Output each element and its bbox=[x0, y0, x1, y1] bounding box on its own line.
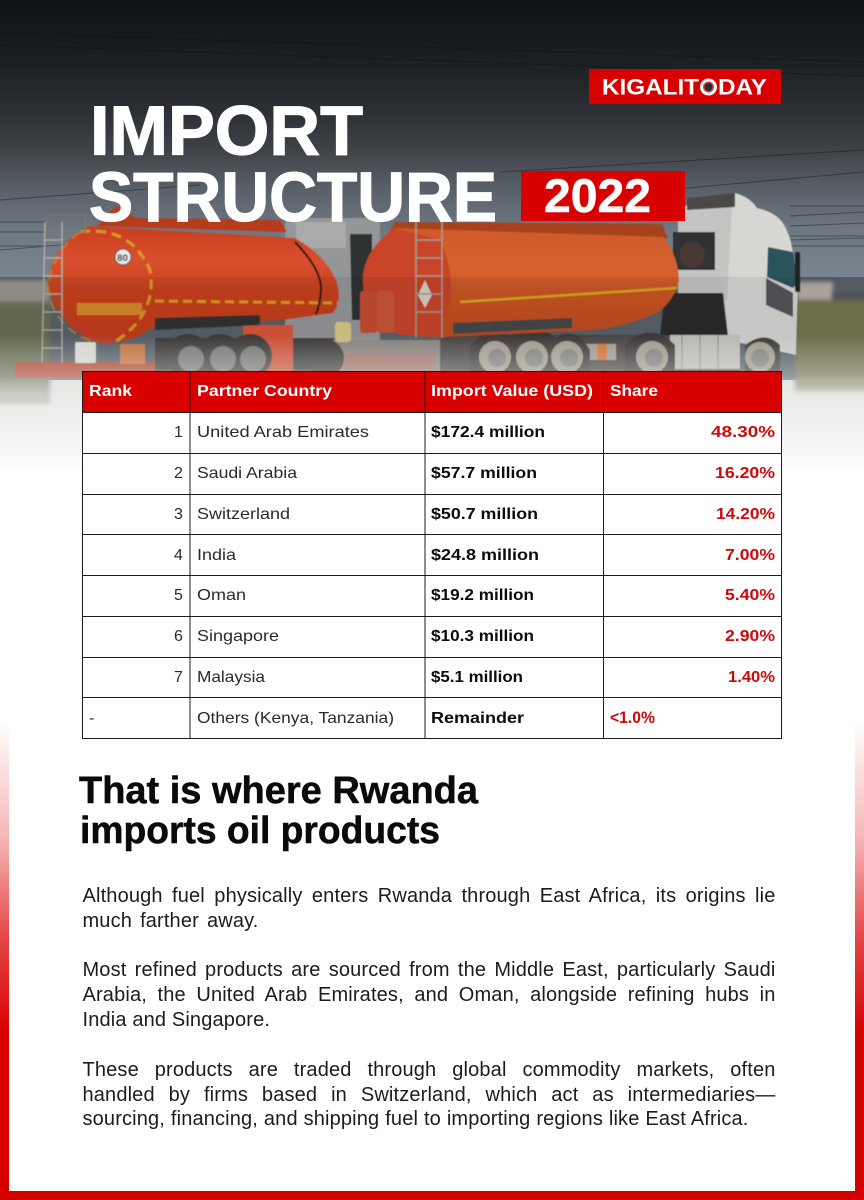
table body: 1.40% bbox=[728, 669, 775, 686]
table body: 16.20% bbox=[715, 465, 775, 482]
table body: 5.40% bbox=[725, 587, 775, 604]
logo: Kigali Today: DAY bbox=[718, 74, 767, 100]
logo: Kigali Today bbox=[589, 69, 781, 104]
table body: $19.2 million bbox=[431, 587, 534, 604]
body text: much farther away. bbox=[82, 910, 258, 932]
table header: Import Value (USD) bbox=[431, 383, 593, 400]
body text: These products are traded through global commodity markets, often bbox=[82, 1059, 776, 1081]
table body: $24.8 million bbox=[431, 547, 539, 564]
table body: India bbox=[197, 547, 236, 564]
table body: 5 bbox=[174, 587, 183, 604]
table body: 7 bbox=[174, 669, 183, 686]
title: STRUCTURE bbox=[89, 158, 497, 236]
body text: India and Singapore. bbox=[82, 1009, 270, 1031]
table body: 2 bbox=[174, 465, 183, 482]
tractor cab bbox=[678, 193, 798, 355]
table header: Rank bbox=[89, 383, 132, 400]
table body: 2.90% bbox=[725, 628, 775, 645]
table body: 48.30% bbox=[711, 424, 775, 441]
section heading bbox=[79, 770, 479, 852]
table body: Switzerland bbox=[197, 506, 290, 523]
title: IMPORT bbox=[90, 92, 363, 170]
table body: 14.20% bbox=[716, 506, 775, 523]
table body: Singapore bbox=[197, 628, 279, 645]
section heading: imports oil products bbox=[80, 810, 440, 852]
table body: - bbox=[89, 710, 94, 727]
table body: Saudi Arabia bbox=[197, 465, 297, 482]
left tank bbox=[97, 205, 287, 232]
chassis and deck bbox=[15, 362, 155, 378]
body text: handled by firms based in Switzerland, which act as intermediaries— bbox=[82, 1084, 776, 1106]
table body: $57.7 million bbox=[431, 465, 537, 482]
table header bbox=[82, 371, 782, 412]
table body: $5.1 million bbox=[431, 669, 523, 686]
body text: Although fuel physically enters Rwanda through East Africa, its origins lie bbox=[82, 885, 776, 907]
white content panel with red gradient frame bbox=[0, 700, 864, 1200]
body text: Most refined products are sourced from the Middle East, particularly Saudi bbox=[82, 959, 776, 981]
table body: $10.3 million bbox=[431, 628, 534, 645]
year badge bbox=[521, 169, 685, 222]
wheels bbox=[166, 329, 780, 378]
table body: 6 bbox=[174, 628, 183, 645]
table body bbox=[82, 371, 782, 739]
table body: 4 bbox=[174, 547, 183, 564]
table body: Malaysia bbox=[197, 669, 265, 686]
section heading: That is where Rwanda bbox=[79, 770, 479, 812]
photo background: tanker truck bbox=[0, 0, 864, 475]
table body: Remainder bbox=[431, 710, 524, 727]
title bbox=[89, 92, 497, 236]
table body: $172.4 million bbox=[431, 424, 545, 441]
right tank bbox=[385, 222, 668, 240]
body text: sourcing, financing, and shipping fuel to importing regions like East Africa. bbox=[82, 1108, 748, 1130]
table body: $50.7 million bbox=[431, 506, 538, 523]
year badge: 2022 bbox=[544, 169, 651, 222]
table body: 7.00% bbox=[725, 547, 775, 564]
table body: 1 bbox=[174, 424, 183, 441]
table body: 3 bbox=[174, 506, 183, 523]
import partners table bbox=[82, 371, 782, 739]
table body: Others (Kenya, Tanzania) bbox=[197, 710, 394, 727]
table body: <1.0% bbox=[610, 708, 655, 727]
rear cab behind left tank bbox=[285, 218, 380, 348]
photo background: tanker truck: 80 bbox=[117, 253, 128, 264]
logo: Kigali Today: KIGALIT bbox=[602, 74, 700, 100]
table header: Partner Country bbox=[197, 383, 332, 400]
table body: United Arab Emirates bbox=[197, 424, 369, 441]
table body: Oman bbox=[197, 587, 246, 604]
body text: Arabia, the United Arab Emirates, and Oman, alongside refining hubs in bbox=[82, 984, 776, 1006]
table header: Share bbox=[610, 383, 658, 400]
